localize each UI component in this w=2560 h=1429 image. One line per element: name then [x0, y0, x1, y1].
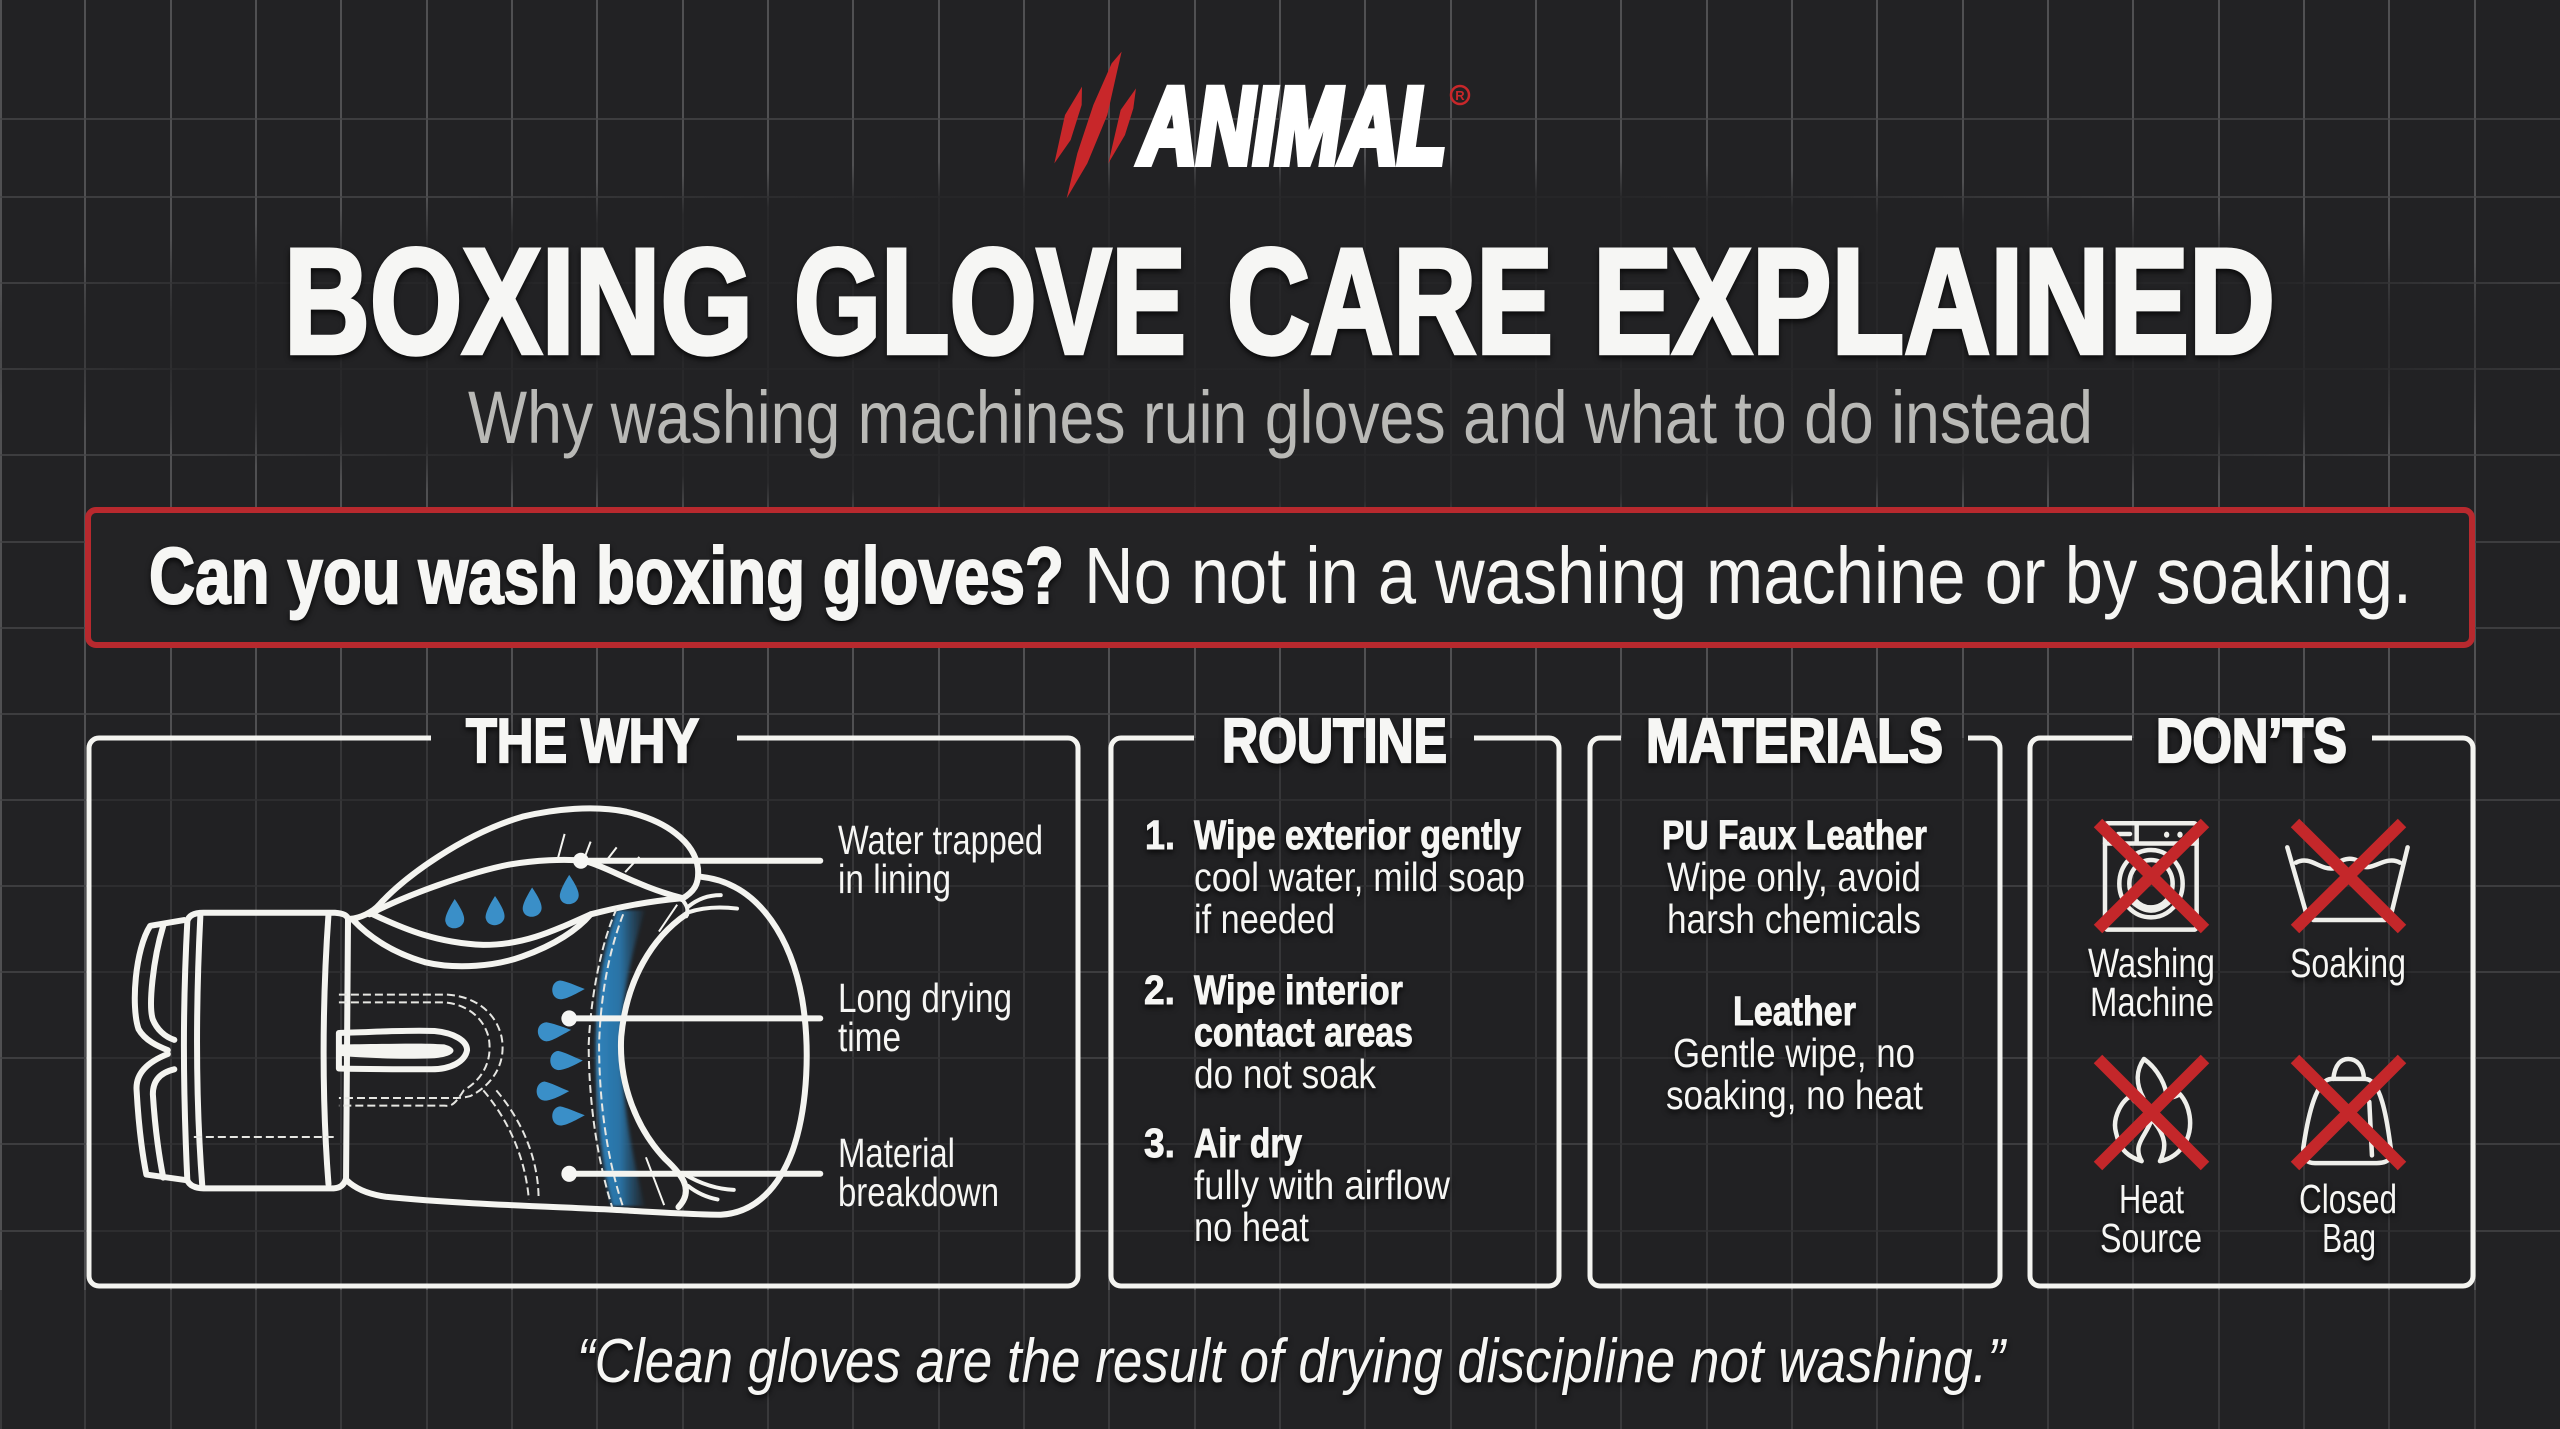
heading: the why: THE WHY: [466, 707, 699, 776]
label: closed bag: [2299, 1176, 2397, 1261]
step 1: cool water, mild soap: [1194, 854, 1525, 900]
icon: soaking basin crossed out: [2287, 823, 2408, 929]
panel: don'ts: [2030, 707, 2473, 1286]
subtitle: Why washing machines ruin gloves and what to do instead: [468, 376, 2093, 459]
material: pu faux leather: harsh chemicals: [1667, 896, 1921, 942]
step 3: fully with airflow: [1194, 1162, 1450, 1208]
label: heat source: Heat: [2119, 1176, 2184, 1222]
title area grid fade: [0, 155, 2560, 535]
footer area grid fade: [0, 1290, 2560, 1429]
heading: don'ts: DON’TS: [2156, 707, 2347, 776]
callout banner: [88, 510, 2472, 645]
label: material breakdown: Material: [838, 1130, 955, 1176]
label: long drying time: time: [838, 1014, 901, 1060]
material: pu faux leather: Wipe only, avoid: [1667, 854, 1921, 900]
callout line: material breakdown: [561, 1166, 820, 1182]
icon: claw marks: [1054, 52, 1136, 198]
glove diagram: [135, 808, 820, 1215]
footer quote: “Clean gloves are the result of drying discipline not washing.”: [577, 1327, 2007, 1396]
panel: materials: [1590, 707, 2000, 1286]
step 1: 1.: [1145, 812, 1175, 858]
icon: closed bag crossed out: [2295, 1059, 2402, 1166]
callout line: long drying: [561, 1010, 820, 1026]
heading: routine: ROUTINE: [1222, 707, 1447, 776]
registered mark: R: [1455, 88, 1465, 103]
step 1: [1145, 812, 1525, 942]
logo: [1054, 52, 1469, 198]
material: leather: [1666, 988, 1924, 1118]
title: EXPLAINED: [1593, 217, 2275, 385]
label: washing machine: [2088, 940, 2215, 1025]
moisture band: [596, 910, 645, 1206]
glove outline: [135, 808, 807, 1215]
step 3: [1144, 1120, 1450, 1250]
material: leather: Gentle wipe, no: [1673, 1030, 1915, 1076]
label: closed bag: Bag: [2322, 1215, 2376, 1261]
panel: routine: [1111, 707, 1559, 1286]
label: heat source: Source: [2100, 1215, 2202, 1261]
panel: the why: [89, 707, 1078, 1286]
icon: washing machine crossed out: [2098, 823, 2205, 930]
label: heat source: [2100, 1176, 2202, 1261]
label: soaking: Soaking: [2290, 940, 2406, 986]
step 3: no heat: [1194, 1204, 1310, 1250]
label: washing machine: Washing: [2088, 940, 2215, 986]
step 3: 3.: [1144, 1120, 1175, 1166]
title: GLOVE: [794, 217, 1186, 385]
label: long drying time: [838, 975, 1012, 1060]
water drops in palm: [537, 981, 585, 1126]
logo wordmark: ANIMAL: [1138, 65, 1446, 186]
material: leather: Leather: [1733, 988, 1856, 1034]
step 2: contact areas: [1194, 1009, 1413, 1055]
material: leather: soaking, no heat: [1666, 1072, 1924, 1118]
registered mark: [1451, 86, 1469, 104]
stitching: [194, 834, 677, 1207]
material: pu faux leather: PU Faux Leather: [1662, 812, 1927, 858]
label: water trapped in lining: Water trapped: [838, 817, 1043, 863]
title: CARE: [1227, 217, 1553, 385]
label: closed bag: Closed: [2299, 1176, 2397, 1222]
step 2: [1144, 967, 1413, 1097]
label: washing machine: Machine: [2090, 979, 2214, 1025]
label: material breakdown: breakdown: [838, 1169, 999, 1215]
banner question: Can you wash boxing gloves?: [149, 531, 1064, 620]
title: BOXING: [284, 217, 753, 385]
heading: materials: MATERIALS: [1646, 707, 1943, 776]
label: water trapped in lining: in lining: [838, 856, 951, 902]
step 1: if needed: [1194, 896, 1335, 942]
step 2: 2.: [1144, 967, 1175, 1013]
label: water trapped in lining: [838, 817, 1043, 902]
label: long drying time: Long drying: [838, 975, 1012, 1021]
step 1: Wipe exterior gently: [1194, 812, 1521, 858]
label: material breakdown: [838, 1130, 999, 1215]
step 3: Air dry: [1194, 1120, 1302, 1166]
material: pu faux leather: [1662, 812, 1927, 942]
step 2: do not soak: [1194, 1051, 1376, 1097]
callout line: water trapped: [573, 853, 820, 869]
step 2: Wipe interior: [1194, 967, 1403, 1013]
water drops in lining: [445, 875, 579, 928]
icon: heat source crossed out: [2098, 1059, 2205, 1166]
title: [284, 217, 2275, 385]
